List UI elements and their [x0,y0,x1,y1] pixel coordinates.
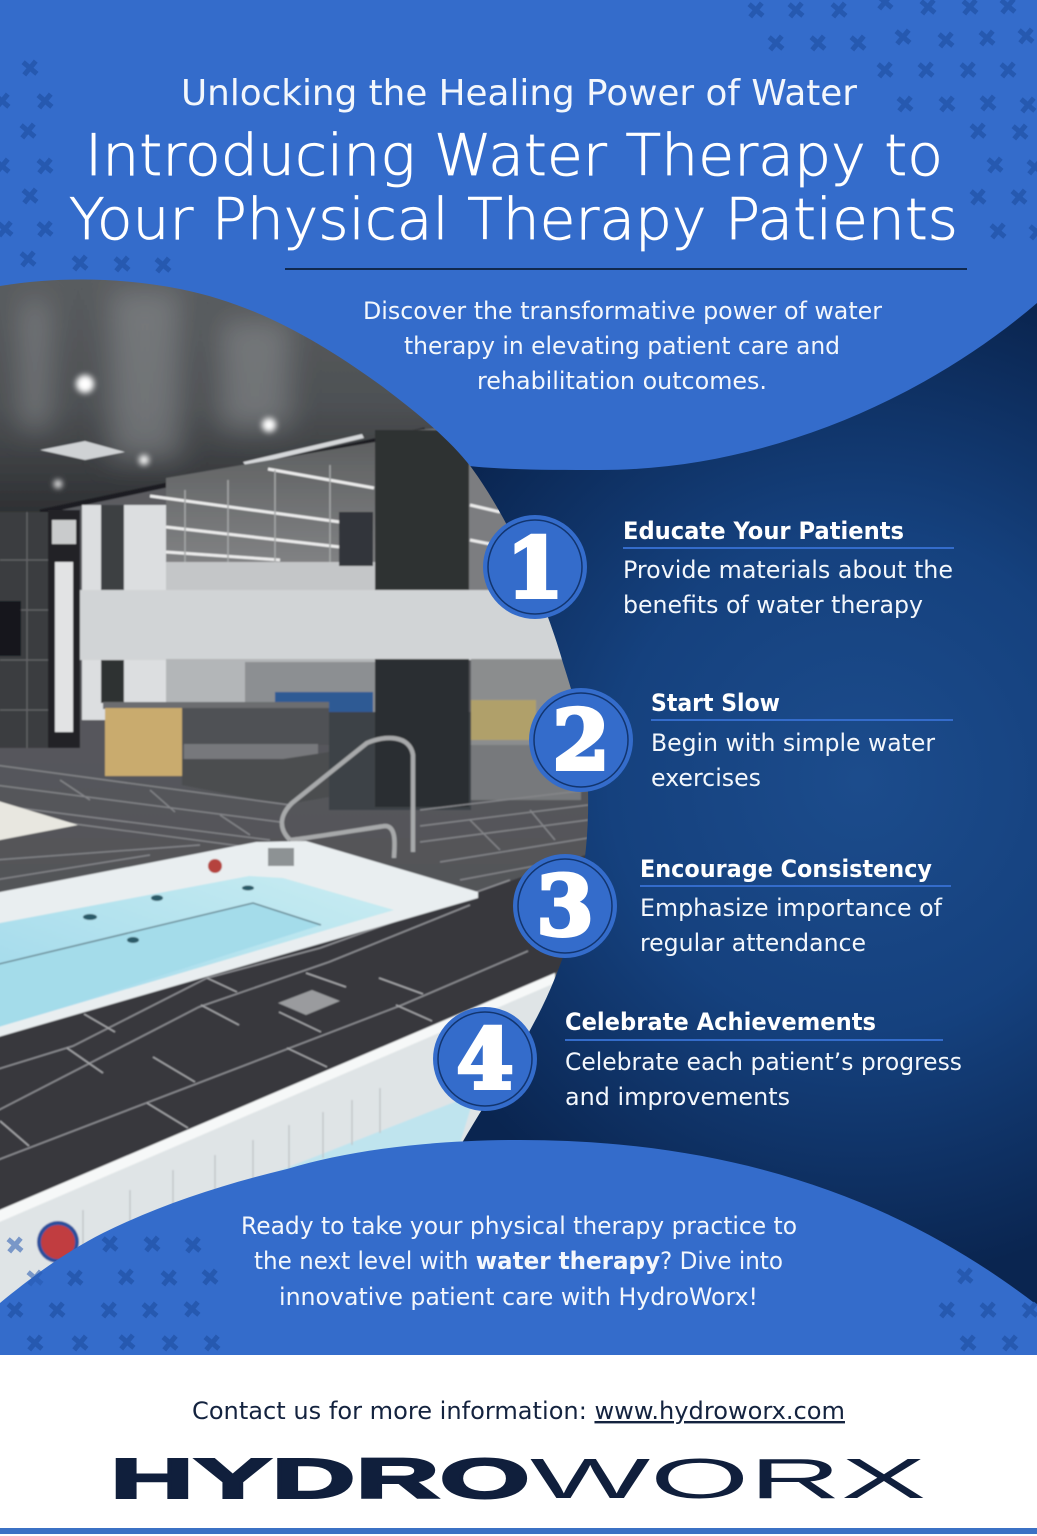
counter [103,702,329,709]
step 3 badge [513,854,617,958]
step 4 text: Celebrate each patient’s progress [565,1048,962,1076]
step 4 text [565,1008,962,1111]
main title: Introducing Water Therapy to [85,123,943,189]
step 1 text: Educate Your Patients [623,517,904,545]
frosted band [80,590,570,660]
step 1 badge: 1 [506,521,564,617]
white mat [0,800,78,841]
intro text [363,297,882,395]
team logo on pool wall [37,1221,79,1263]
step 2 text: Start Slow [651,689,780,717]
contact line: Contact us for more information: www.hydroworx.com [192,1397,845,1425]
intro text: therapy in elevating patient care and [404,332,840,360]
step 3 text: Emphasize importance of [640,894,943,922]
main title: Your Physical Therapy Patients [69,187,958,253]
step 2 text [651,689,953,792]
footer panel [0,1355,1037,1536]
step 1 text: Provide materials about the [623,556,953,584]
closing call to action: the next level with water therapy? Dive into [254,1247,783,1275]
cross pattern: bottom right [934,1263,1037,1356]
left tile wall [0,512,48,748]
photo: hydrotherapy pool room [0,270,600,1330]
step 2 badge [529,688,633,792]
closing call to action: innovative patient care with HydroWorx! [279,1283,758,1311]
intro text: Discover the transformative power of water [363,297,882,325]
pool deck [0,850,600,1212]
ceiling [0,288,434,513]
intro text: rehabilitation outcomes. [477,367,767,395]
cross pattern: bottom left [2,1231,225,1356]
bottom blue blob [0,1140,1037,1355]
closing call to action [241,1212,797,1311]
step 1 text: benefits of water therapy [623,591,923,619]
cross pattern: top right [743,0,1037,245]
step 3 badge: 3 [536,859,594,955]
dark navy panel [440,303,1037,1320]
white wall [82,505,166,720]
ceiling lights [40,375,364,488]
cross pattern: top left [0,55,176,278]
logo wordmark: WORX [530,1447,926,1511]
step 4 badge [433,1007,537,1111]
step 2 text: Begin with simple water [651,729,935,757]
step 3 text: Encourage Consistency [640,855,932,883]
pool rim [0,841,478,1038]
near pool wall [0,983,553,1303]
floor lines [0,764,588,882]
step 1 badge [483,515,587,619]
subtitle: Unlocking the Healing Power of Water [181,73,857,114]
step 2 text: exercises [651,764,761,792]
step 3 text [640,855,951,957]
closing call to action: Ready to take your physical therapy practice to [241,1212,797,1240]
step 1 text [623,517,954,619]
step 2 badge: 2 [552,693,610,789]
glass room upper [165,441,376,562]
step 4 text: Celebrate Achievements [565,1008,876,1036]
floor drain [278,990,340,1015]
pool water [0,876,394,1028]
lower room [166,660,376,703]
step 4 badge: 4 [456,1012,514,1108]
handrail [282,738,413,858]
monitor [339,512,373,566]
step 3 text: regular attendance [640,929,866,957]
black column [375,430,469,590]
logo wordmark [110,1447,926,1511]
main title [69,123,958,253]
logo wordmark: HYDRO [110,1447,530,1511]
step 4 text: and improvements [565,1083,790,1111]
